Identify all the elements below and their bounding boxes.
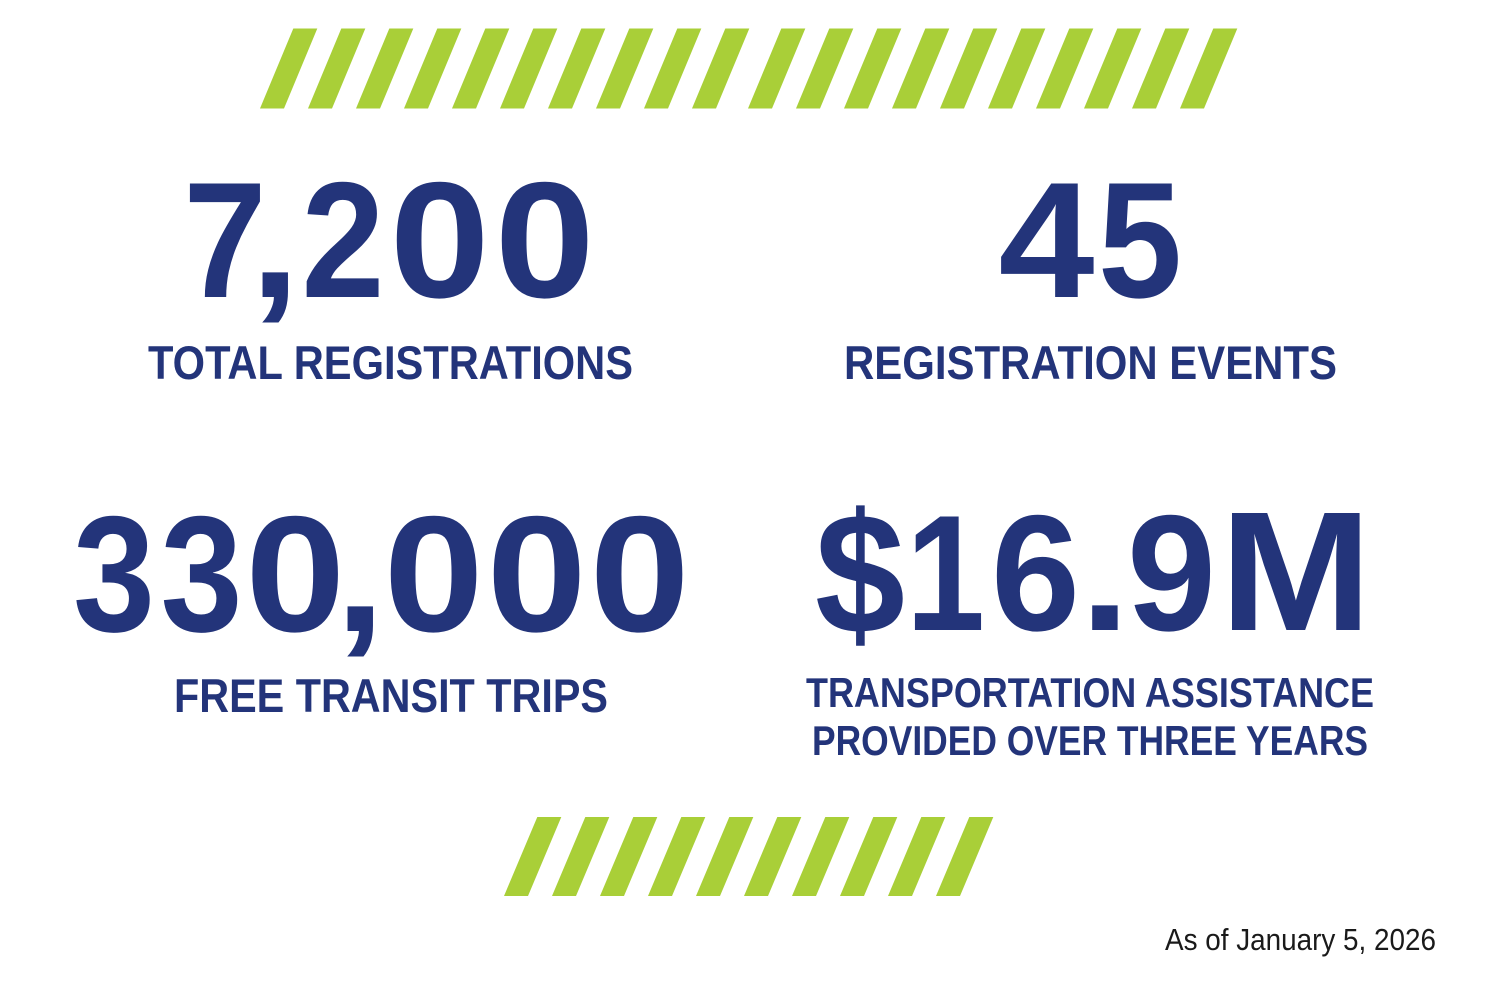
top stripe band [260, 28, 1237, 108]
number: $16.9M: $ [815, 478, 905, 670]
label: free transit trips: FREE TRANSIT TRIPS [174, 669, 608, 722]
number: 7,200: 2 [302, 148, 384, 332]
label: transportation assistance provided over three years: TRANSPORTATION ASSISTANCE [806, 669, 1374, 716]
stat: total registrations [148, 148, 633, 389]
number: 7,200: 0 [495, 148, 595, 332]
number: 330,000: 3 [73, 482, 155, 666]
number: 7,200: 0 [390, 148, 490, 332]
stat: transportation assistance [806, 477, 1374, 764]
number: $16.9M: M [1220, 477, 1372, 667]
label: total registrations: TOTAL REGISTRATIONS [148, 336, 633, 389]
label: registration events: REGISTRATION EVENTS [844, 336, 1337, 389]
number: $16.9M: 6 [991, 481, 1080, 665]
label: transportation assistance provided over three years [806, 669, 1374, 764]
number: 45: 5 [1098, 148, 1182, 332]
number: 330,000: 0 [487, 482, 587, 666]
label: transportation assistance provided over three years: PROVIDED OVER THREE YEARS [812, 717, 1368, 764]
number: 7,200: 7 [184, 148, 266, 332]
stat: registration events [844, 148, 1337, 389]
number: 7,200: , [250, 148, 300, 332]
number: 45: 4 [998, 148, 1094, 332]
number: 330,000: , [335, 482, 385, 666]
number: 330,000: 3 [160, 482, 242, 666]
footnote: date: As of January 5, 2026 [1165, 922, 1436, 957]
stat: free transit trips [73, 482, 690, 722]
number: $16.9M: . [1080, 481, 1130, 665]
number: 330,000: 0 [384, 482, 484, 666]
number: $16.9M: 9 [1127, 481, 1216, 665]
number: $16.9M: 1 [906, 481, 985, 665]
number: 330,000: 0 [245, 482, 345, 666]
number: 330,000: 0 [590, 482, 690, 666]
bottom stripe band [504, 817, 993, 896]
